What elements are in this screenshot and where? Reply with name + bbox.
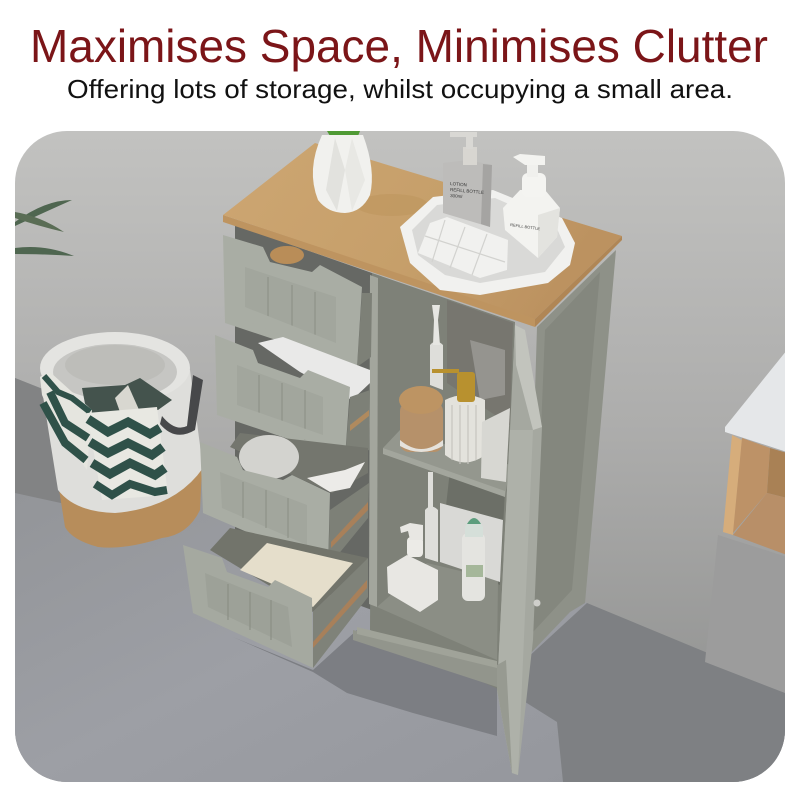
white pump bottle (503, 154, 560, 258)
photo panel: bathroom scene (15, 131, 787, 782)
lotion refill bottle: 300ml (450, 193, 463, 199)
lotion refill bottle: LOTION (450, 181, 467, 187)
wall (15, 131, 785, 782)
deodorant can (462, 518, 485, 601)
plant leaves (15, 200, 74, 256)
title: Maximises Space, Minimises Clutter (30, 20, 768, 72)
wood inner side (733, 438, 770, 533)
drawer 1 (223, 235, 372, 367)
drawer 4 (183, 528, 368, 668)
basket straw base (58, 468, 202, 548)
blanket left drape (40, 376, 92, 414)
lotion refill bottle (443, 132, 492, 227)
divider front (369, 275, 378, 607)
basket white body (40, 370, 202, 513)
cabinet interior (370, 273, 515, 690)
cotton bud jar (399, 386, 443, 452)
wood back (767, 448, 785, 498)
white pump bottle: REFILL BOTTLE (510, 222, 541, 231)
blanket inside basket (82, 378, 172, 414)
concrete base (705, 652, 785, 693)
door (497, 325, 542, 775)
basket handle (160, 375, 203, 435)
blanket front flap (87, 407, 168, 500)
bottom shelf (377, 563, 498, 660)
floor shadow under drawers (233, 630, 497, 736)
shelf (383, 430, 510, 497)
door knob (534, 600, 540, 606)
white box on lower shelf (440, 503, 503, 582)
subtitle: Offering lots of storage, whilst occupying a small area. (67, 74, 733, 104)
floor shadow behind basket (15, 378, 61, 503)
woven basket (40, 332, 203, 548)
vase with plant (313, 131, 372, 213)
toothbrush 2 (425, 472, 438, 562)
cabinet (183, 143, 622, 775)
wood top (223, 143, 622, 319)
soap pump on lower shelf (387, 523, 438, 612)
white tray (400, 190, 575, 295)
dark body behind drawers (235, 225, 372, 610)
wallpaper back panel (447, 300, 513, 425)
right vanity unit (705, 350, 787, 693)
toothbrush 1 (430, 305, 443, 390)
cabinet right side (527, 250, 616, 657)
gold pump soap dispenser (432, 369, 485, 464)
lotion refill bottle: REFILL BOTTLE (450, 187, 484, 195)
rolled towel (418, 217, 508, 278)
wood outer frame (723, 435, 742, 535)
floor (15, 378, 785, 782)
plinth (353, 630, 497, 687)
wood shelf (733, 493, 787, 555)
vase shadow on wood (359, 194, 413, 216)
interior back wall below shelf (446, 478, 504, 585)
floor shadow right of cabinet (522, 603, 785, 782)
basket rim (40, 332, 190, 376)
drawer 2 (215, 335, 370, 458)
wood top edge (223, 215, 535, 327)
terrazzo box (481, 408, 510, 482)
drawer 3 (200, 433, 369, 552)
white counter (725, 350, 787, 452)
